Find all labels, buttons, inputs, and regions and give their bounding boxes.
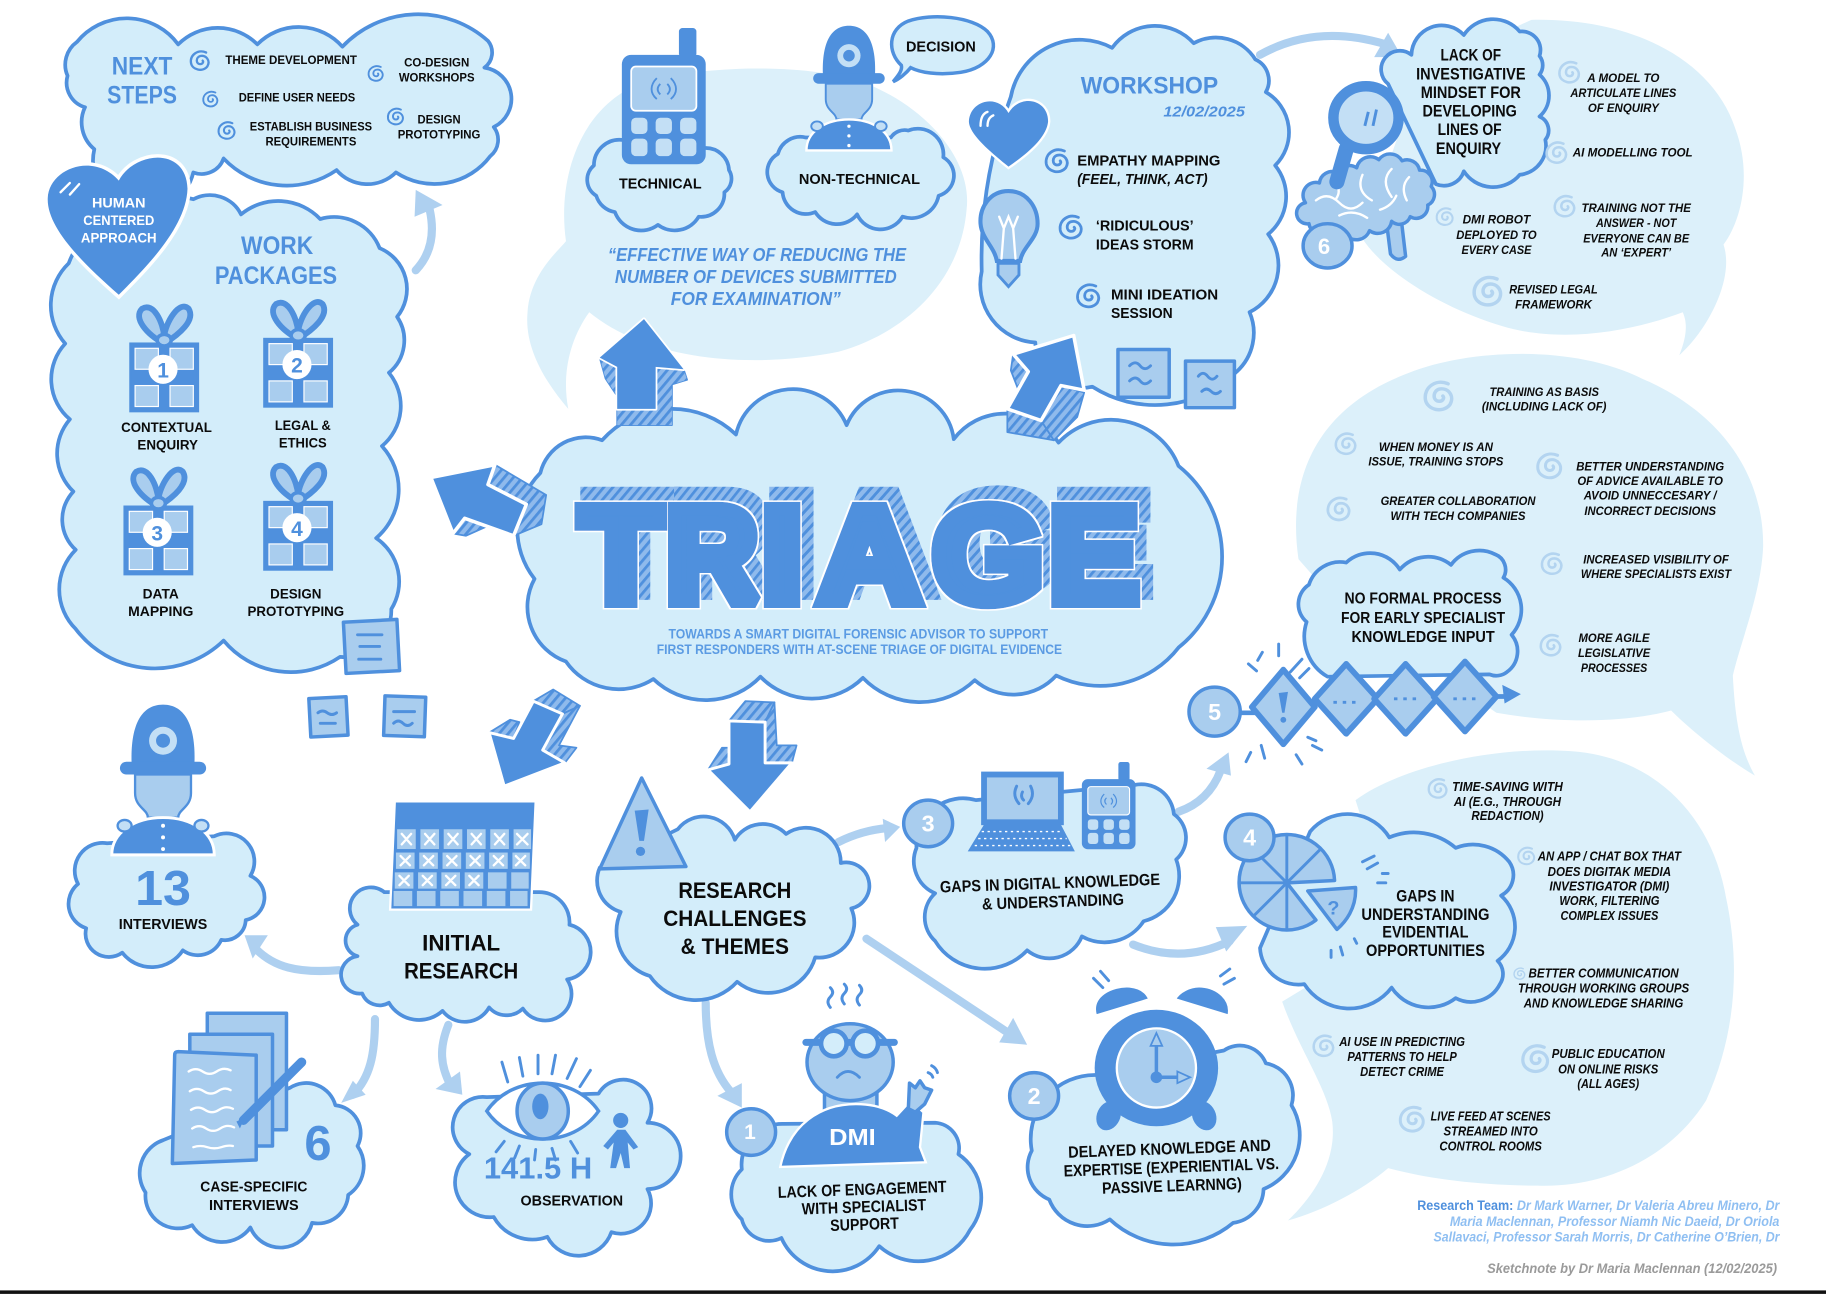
text: specialist ideas: AVOID UNNECCESARY / xyxy=(1583,489,1718,503)
icon: gift 4: 4 xyxy=(291,518,303,541)
text: work package labels: CONTEXTUAL xyxy=(121,420,212,435)
heart: human centered approach xyxy=(48,158,187,295)
text: next step items: THEME DEVELOPMENT xyxy=(225,53,357,67)
icon: person xyxy=(603,1113,638,1168)
text: opportunities ideas: AI (E.G., THROUGH xyxy=(1453,794,1562,809)
text: mindset ideas: TRAINING NOT THE xyxy=(1581,201,1692,215)
arrow: up-right to workshop xyxy=(1007,335,1084,440)
title: TRIAGE: R xyxy=(666,480,758,630)
text: specialist ideas: INCORRECT DECISIONS xyxy=(1584,504,1717,518)
heading: workshop: WORKSHOP xyxy=(1081,72,1218,99)
label: gaps in digital knowledge: & UNDERSTANDING xyxy=(982,891,1124,914)
panel: technical and non-technical quote xyxy=(587,17,993,309)
icon: DMI person xyxy=(780,984,937,1167)
arrow: down to research challenges xyxy=(708,701,797,812)
arrow: challenges to gap 3 xyxy=(838,819,900,842)
badge: 3 xyxy=(904,800,953,847)
arrow: gap 3 to gap 5 xyxy=(1179,752,1231,812)
badge: 5 xyxy=(1189,687,1240,736)
text: specialist ideas: (INCLUDING LACK OF) xyxy=(1482,400,1606,414)
heading: next steps xyxy=(107,53,177,110)
text: work package labels: ENQUIRY xyxy=(137,438,198,453)
subtitle: FIRST RESPONDERS WITH AT-SCENE TRIAGE OF DIGITAL EVIDENCE xyxy=(657,642,1062,657)
text: opportunities ideas: AND KNOWLEDGE SHARING xyxy=(1523,995,1683,1010)
process diamonds xyxy=(1240,644,1521,764)
panel: research challenges and themes xyxy=(597,778,869,1000)
text: next step items: REQUIREMENTS xyxy=(266,135,356,149)
text: workshop activities: (FEEL, THINK, ACT) xyxy=(1077,171,1208,188)
heading: next steps: NEXT xyxy=(112,53,173,81)
date: 12/02/2025 xyxy=(1163,105,1246,121)
icons: spirals xyxy=(1328,382,1561,655)
research team credits: Research Team: Dr Mark Warner, Dr Valeria Abreu Minero, Dr xyxy=(1417,1198,1780,1213)
label: lack of engagement xyxy=(777,1178,948,1237)
icon: light bulb xyxy=(980,191,1038,287)
title: TRIAGE xyxy=(580,480,1139,630)
title: TRIAGE: A xyxy=(819,481,920,630)
arrow: up to quote xyxy=(600,319,687,425)
badge: 6: 6 xyxy=(1318,234,1330,259)
icon: pie chart: ? xyxy=(1327,897,1339,919)
text: workshop activities: MINI IDEATION xyxy=(1111,286,1218,303)
badge: 1: 1 xyxy=(744,1121,756,1144)
icon: gift 1 xyxy=(130,307,198,411)
text: work package labels: MAPPING xyxy=(128,604,193,619)
label: gaps in digital knowledge xyxy=(940,871,1161,915)
text: opportunities ideas: DETECT CRIME xyxy=(1360,1064,1444,1079)
text: lack of investigative mindset: MINDSET FOR xyxy=(1421,84,1521,102)
title shadow hatch: T xyxy=(589,469,671,618)
heading: next steps: STEPS xyxy=(107,82,177,110)
text: lack of investigative mindset: LACK OF xyxy=(1441,47,1501,65)
panel: initial research xyxy=(341,801,591,1022)
text: mindset ideas: A MODEL TO xyxy=(1586,71,1660,85)
text: specialist ideas: WHERE SPECIALISTS EXIST xyxy=(1581,567,1732,581)
text: workshop activities: ‘RIDICULOUS’ xyxy=(1096,218,1194,235)
icon: heart xyxy=(969,101,1048,167)
text: workshop activities: EMPATHY MAPPING xyxy=(1077,152,1220,169)
text: opportunities ideas: REDACTION) xyxy=(1471,808,1544,823)
title shadow hatch: R xyxy=(675,468,767,618)
speech bubble: investigative mindset ideas xyxy=(1363,20,1744,355)
icon: sticky note right xyxy=(1186,361,1234,408)
text: mindset ideas: FRAMEWORK xyxy=(1515,298,1593,312)
title shadow hatch: I xyxy=(771,469,812,618)
icon: small phone xyxy=(1082,762,1136,849)
icon: magnifying glass xyxy=(1333,86,1399,182)
badge: 4: 4 xyxy=(1243,825,1256,851)
text: specialist ideas: INCREASED VISIBILITY OF xyxy=(1583,552,1729,566)
text: mindset ideas: REVISED LEGAL xyxy=(1509,283,1598,297)
text: opportunities ideas: COMPLEX ISSUES xyxy=(1560,908,1659,923)
icon: alarm clock xyxy=(1092,969,1234,1134)
icon: gift 4 xyxy=(264,465,332,570)
text: next step items: WORKSHOPS xyxy=(399,71,475,85)
heart: human centered approach: CENTERED xyxy=(83,213,155,228)
label: lack of engagement: SUPPORT xyxy=(830,1215,899,1235)
text: specialist ideas: ISSUE, TRAINING STOPS xyxy=(1368,454,1504,468)
title: TRIAGE: I xyxy=(762,480,803,630)
label: gaps in digital knowledge: GAPS IN DIGITAL KNOWLEDGE xyxy=(940,871,1160,896)
label: gaps in understanding: GAPS IN xyxy=(1396,887,1455,905)
arrow: work packages to next steps xyxy=(415,190,443,270)
text: opportunities ideas: STREAMED INTO xyxy=(1443,1124,1538,1139)
text: lack of investigative mindset: DEVELOPING xyxy=(1422,103,1517,121)
title shadow hatch xyxy=(589,468,1148,619)
icon: gift 3 xyxy=(125,470,192,574)
speech bubble: specialist knowledge ideas xyxy=(1296,354,1763,776)
panel: workshop xyxy=(969,26,1289,408)
text: specialist ideas: WHEN MONEY IS AN xyxy=(1379,440,1494,454)
arrow: gap 3 to gap 4 xyxy=(1133,926,1247,954)
icon: laptop xyxy=(968,775,1075,851)
label: interviews: INTERVIEWS xyxy=(119,916,207,933)
text: next step items: DESIGN xyxy=(417,113,461,127)
text: opportunities ideas: CONTROL ROOMS xyxy=(1439,1139,1542,1154)
number: 13: 13 xyxy=(135,862,191,916)
text: mindset ideas: ARTICULATE LINES xyxy=(1569,86,1677,100)
label: research challenges and themes xyxy=(663,878,806,959)
text: work package labels: LEGAL & xyxy=(275,418,331,433)
label: gaps in understanding: OPPORTUNITIES xyxy=(1366,942,1485,960)
panel: investigative mindset xyxy=(1297,19,1693,312)
text: opportunities ideas: BETTER COMMUNICATION xyxy=(1528,966,1679,981)
text: specialist ideas: GREATER COLLABORATION xyxy=(1381,494,1537,508)
heading: work packages: WORK xyxy=(241,232,313,260)
badge: 2: 2 xyxy=(1028,1083,1041,1109)
title shadow hatch: G xyxy=(942,469,1053,618)
icon: brain xyxy=(1297,154,1434,259)
text: specialist ideas: WITH TECH COMPANIES xyxy=(1390,509,1526,523)
label: initial research: RESEARCH xyxy=(404,958,518,983)
label: research challenges and themes: RESEARCH xyxy=(678,878,791,903)
icon: police officer xyxy=(806,26,891,150)
heading: work packages: PACKAGES xyxy=(215,262,337,290)
number: 141.5 H: 141.5 H xyxy=(484,1153,592,1186)
label: delayed knowledge: DELAYED KNOWLEDGE AND xyxy=(1068,1137,1271,1162)
text: no formal process: KNOWLEDGE INPUT xyxy=(1351,629,1495,646)
text: work package labels: DESIGN xyxy=(270,587,321,602)
text: mindset ideas: AI MODELLING TOOL xyxy=(1572,146,1693,160)
speech bubble: decision: DECISION xyxy=(906,39,976,55)
text: specialist ideas: LEGISLATIVE xyxy=(1578,646,1651,660)
label: gaps in understanding xyxy=(1361,887,1489,960)
text: lack of investigative mindset xyxy=(1416,47,1526,158)
label: lack of engagement: WITH SPECIALIST xyxy=(801,1196,927,1219)
text: opportunities ideas: AI USE IN PREDICTING xyxy=(1338,1034,1465,1049)
panel: work packages xyxy=(51,195,407,673)
panel: next steps xyxy=(65,14,511,212)
label: non-technical: NON-TECHNICAL xyxy=(799,171,920,188)
title shadow hatch: A xyxy=(828,469,930,619)
text: specialist ideas: TRAINING AS BASIS xyxy=(1489,385,1600,399)
text: mindset ideas: AN ‘EXPERT’ xyxy=(1600,245,1672,259)
icon: warning triangle xyxy=(600,778,686,869)
label: initial research xyxy=(404,930,518,983)
icons: spirals xyxy=(1046,150,1099,307)
text: lack of investigative mindset: INVESTIGATIVE xyxy=(1416,65,1526,83)
text: mindset ideas: DEPLOYED TO xyxy=(1456,228,1537,242)
label: gaps in understanding: EVIDENTIAL xyxy=(1382,924,1469,942)
icon: gift 3: 3 xyxy=(151,522,163,545)
text: workshop activities: SESSION xyxy=(1111,305,1173,322)
text: specialist ideas: BETTER UNDERSTANDING xyxy=(1576,460,1725,474)
text: opportunities ideas: WORK, FILTERING xyxy=(1559,893,1660,908)
icon: gift 2 xyxy=(264,302,332,407)
badge: 1 xyxy=(727,1109,776,1155)
icons: spirals xyxy=(191,51,403,139)
icon: sticky note small right xyxy=(384,696,426,737)
text: work package labels xyxy=(121,418,344,619)
label: gaps in understanding: UNDERSTANDING xyxy=(1361,906,1489,924)
research team credits: Sallavaci, Professor Sarah Morris, Dr Catherine O’Brien, Dr xyxy=(1434,1229,1780,1244)
speech bubble: quote xyxy=(527,68,967,409)
text: work package labels: ETHICS xyxy=(279,435,327,450)
text: opportunities ideas: INVESTIGATOR (DMI) xyxy=(1549,878,1669,893)
label: case-specific interviews: CASE-SPECIFIC xyxy=(200,1178,307,1195)
text: next step items: CO-DESIGN xyxy=(404,55,469,69)
text: next step items: DEFINE USER NEEDS xyxy=(239,90,355,104)
badge: 6 xyxy=(1303,224,1352,268)
text: mindset ideas: ANSWER - NOT xyxy=(1595,216,1678,230)
panel: 13 interviews xyxy=(69,705,264,967)
text: opportunities ideas xyxy=(1338,779,1690,1154)
quote text: FOR EXAMINATION” xyxy=(671,289,842,309)
text: workshop activities: IDEAS STORM xyxy=(1096,236,1194,253)
icon: documents and pen xyxy=(172,1013,302,1163)
cloud: technical xyxy=(587,140,731,230)
quote text: “EFFECTIVE WAY OF REDUCING THE xyxy=(608,245,907,265)
text: opportunities ideas: ON ONLINE RISKS xyxy=(1558,1061,1659,1076)
panel: no formal process xyxy=(1189,382,1732,764)
label: research challenges and themes: & THEMES xyxy=(681,934,789,959)
text: specialist ideas: OF ADVICE AVAILABLE TO xyxy=(1577,474,1723,488)
heart: human centered approach: HUMAN xyxy=(92,195,146,210)
cloud: gaps in understanding xyxy=(1260,814,1515,1008)
icon: eye xyxy=(487,1055,599,1160)
sketchnote credit: Sketchnote by Dr Maria Maclennan (12/02/2025) xyxy=(1487,1261,1778,1276)
panel: gap 4 evidential opportunities xyxy=(1225,779,1690,1154)
label: technical: TECHNICAL xyxy=(619,176,702,193)
research team credits: Maria Maclennan, Professor Niamh Nic Daeid, Dr Oriola xyxy=(1450,1214,1780,1229)
label: observation: OBSERVATION xyxy=(521,1192,623,1209)
text: opportunities ideas: (ALL AGES) xyxy=(1577,1076,1639,1091)
label: initial research: INITIAL xyxy=(422,930,500,955)
text: mindset ideas xyxy=(1456,71,1693,312)
text: specialist ideas xyxy=(1368,385,1732,675)
icon: sticky note small left xyxy=(309,697,348,737)
label: case-specific interviews xyxy=(200,1178,307,1214)
icon: sticky note xyxy=(343,619,400,673)
label: delayed knowledge xyxy=(1063,1136,1280,1199)
title shadow hatch: E xyxy=(1059,469,1148,618)
heading: work packages xyxy=(215,232,337,290)
badge: 4 xyxy=(1225,814,1274,861)
icon: DMI person: DMI xyxy=(829,1124,876,1150)
badge: 5: 5 xyxy=(1208,699,1221,725)
subtitle xyxy=(657,626,1062,657)
text: lack of investigative mindset: LINES OF xyxy=(1438,121,1502,139)
speech bubble: evidential opportunities ideas xyxy=(1282,750,1734,1221)
arrow: challenges to gap 2 xyxy=(866,939,1027,1045)
speech bubble: decision xyxy=(892,17,993,82)
research team credits xyxy=(1417,1198,1780,1244)
icons: spirals xyxy=(1437,62,1579,305)
text: lack of investigative mindset: ENQUIRY xyxy=(1436,140,1501,158)
label: delayed knowledge: EXPERTISE (EXPERIENTIAL VS. xyxy=(1063,1155,1279,1181)
panel: case-specific interviews xyxy=(140,1013,364,1248)
arrow: initial research to interviews xyxy=(245,935,339,971)
number: 6: 6 xyxy=(304,1117,332,1171)
quote text: NUMBER OF DEVICES SUBMITTED xyxy=(615,267,897,287)
panel: gap 1 specialist support xyxy=(727,984,981,1271)
arrow: workshop to lack of mindset xyxy=(1260,33,1402,57)
cloud: non-technical xyxy=(767,129,954,229)
text: mindset ideas: EVERYONE CAN BE xyxy=(1583,231,1690,245)
icon: calendar xyxy=(390,801,536,910)
text: opportunities ideas: PATTERNS TO HELP xyxy=(1347,1049,1457,1064)
text: no formal process: FOR EARLY SPECIALIST xyxy=(1341,610,1506,627)
panel: gap 2 delayed knowledge xyxy=(1010,969,1300,1245)
text: workshop activities xyxy=(1077,152,1220,322)
title: TRIAGE: E xyxy=(1049,481,1139,630)
label: case-specific interviews: INTERVIEWS xyxy=(209,1197,299,1214)
text: work package labels: DATA xyxy=(143,587,179,602)
badge: 3: 3 xyxy=(922,811,935,837)
title: TRIAGE: T xyxy=(580,481,662,630)
label: lack of engagement: LACK OF ENGAGEMENT xyxy=(777,1178,947,1202)
text: specialist ideas: PROCESSES xyxy=(1581,661,1648,675)
text: opportunities ideas: THROUGH WORKING GROUPS xyxy=(1518,980,1690,995)
icon: gift 2: 2 xyxy=(291,355,303,378)
panel: observation xyxy=(453,1055,681,1256)
heart: human centered approach: APPROACH xyxy=(81,230,157,245)
text: mindset ideas: EVERY CASE xyxy=(1461,243,1532,257)
text: opportunities ideas: TIME-SAVING WITH xyxy=(1452,779,1564,794)
text: mindset ideas: OF ENQUIRY xyxy=(1588,101,1661,115)
icon: gift 1: 1 xyxy=(157,359,169,382)
arrow: down-left to initial research xyxy=(489,690,580,786)
icon: pie chart xyxy=(1239,834,1388,957)
text: opportunities ideas: DOES DIGITAK MEDIA xyxy=(1548,864,1671,879)
quote text xyxy=(608,245,907,309)
bottom border line xyxy=(0,1290,1826,1294)
title: TRIAGE: G xyxy=(933,481,1043,630)
icon: mobile phone xyxy=(622,28,706,164)
cloud: no formal process xyxy=(1298,551,1521,677)
arrow: initial research to observation xyxy=(436,1025,462,1095)
panel: TRIAGE centre xyxy=(517,389,1222,702)
icon: police officer xyxy=(112,705,214,855)
text: opportunities ideas: AN APP / CHAT BOX THAT xyxy=(1537,849,1682,864)
text: opportunities ideas: LIVE FEED AT SCENES xyxy=(1431,1108,1551,1123)
arrow: challenges to gap 1 xyxy=(706,1003,742,1108)
text: specialist ideas: MORE AGILE xyxy=(1579,631,1650,645)
label: delayed knowledge: PASSIVE LEARNNG) xyxy=(1102,1175,1242,1198)
text: next step items: ESTABLISH BUSINESS xyxy=(250,120,372,134)
icons: spirals xyxy=(1314,779,1547,1131)
label: research challenges and themes: CHALLENGES xyxy=(663,906,806,931)
text: next step items xyxy=(225,53,480,149)
text: no formal process: NO FORMAL PROCESS xyxy=(1344,590,1502,607)
icon: sticky note left xyxy=(1118,349,1169,397)
text: next step items: PROTOTYPING xyxy=(398,128,480,142)
arrow: left to work packages xyxy=(431,465,546,536)
text: no formal process xyxy=(1341,590,1506,646)
subtitle: TOWARDS A SMART DIGITAL FORENSIC ADVISOR TO SUPPORT xyxy=(668,626,1049,641)
badge: 2 xyxy=(1010,1073,1059,1119)
text: work package labels: PROTOTYPING xyxy=(247,604,344,619)
text: mindset ideas: DMI ROBOT xyxy=(1463,213,1532,227)
text: opportunities ideas: PUBLIC EDUCATION xyxy=(1552,1046,1665,1061)
arrow: initial research to case-specific xyxy=(341,1019,375,1103)
panel: gap 3 digital knowledge xyxy=(904,762,1186,969)
